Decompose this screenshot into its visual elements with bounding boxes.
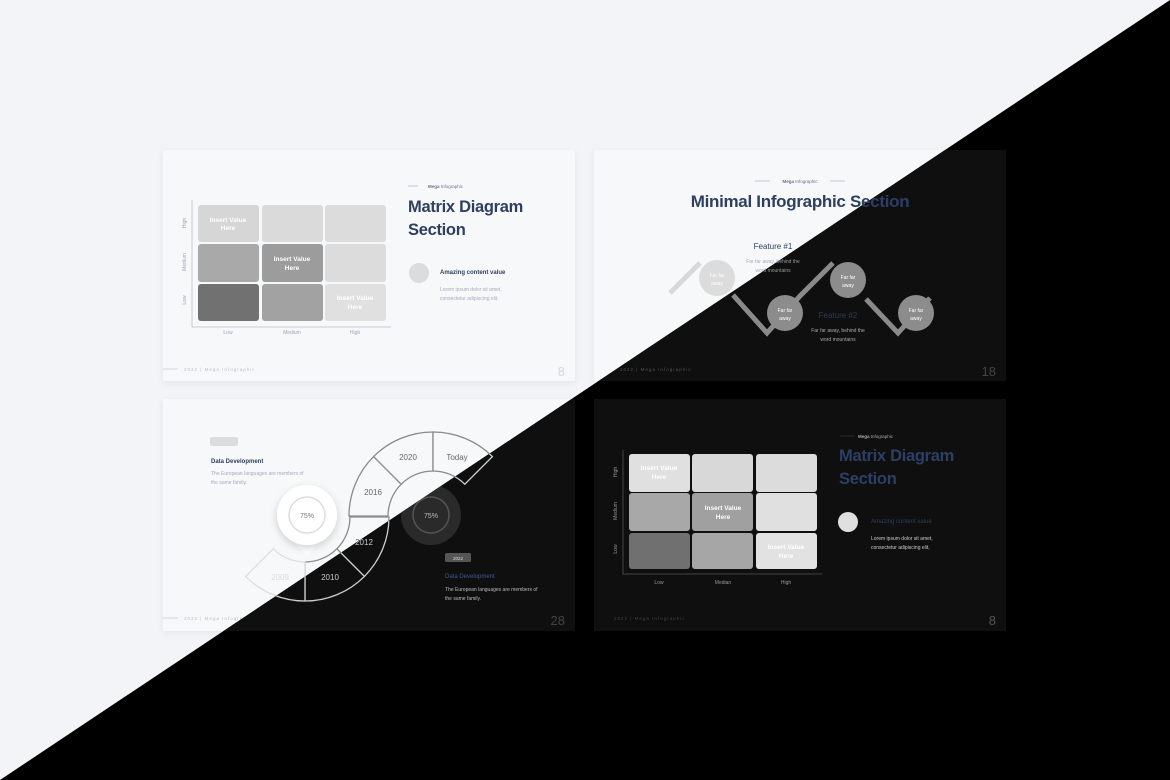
text block: data development: the same family.: [211, 480, 247, 486]
text block: amazing content dark: [871, 519, 933, 551]
zigzag dark: away: [910, 316, 922, 322]
zigzag light: Far far: [710, 273, 725, 279]
feature 2: [811, 311, 865, 343]
panel: timeline light: 2009: [271, 573, 289, 582]
footer: 2022 | Mega Infographic: [184, 367, 255, 372]
panel: timeline light: 2016: [364, 488, 382, 497]
footer: 8: [558, 364, 565, 379]
matrix grid dark: Here: [716, 514, 731, 521]
light layer: [163, 150, 1006, 631]
panel: timeline light: 2022 | Mega Infographic: [184, 616, 255, 621]
panel: matrix diagram dark: 8: [989, 613, 996, 628]
text block: amazing content: Amazing content value: [440, 270, 506, 276]
panel: timeline light: Today: [446, 453, 468, 462]
footer: [163, 364, 565, 379]
text block: data development: Data Development: [211, 459, 263, 465]
text block: amazing content: [440, 270, 506, 302]
icon: pin dark: [838, 512, 858, 532]
zigzag dark: away: [842, 283, 854, 289]
panel: timeline dark: 28: [551, 613, 565, 628]
matrix grid: Medium: [182, 253, 188, 271]
icon: pin: [409, 263, 429, 283]
feature 1: word mountains: [755, 268, 791, 274]
heading: matrix diagram section dark: Mega Infographic: [858, 434, 894, 439]
matrix grid: Insert Value: [337, 295, 374, 302]
donut 75% dark: 75%: [424, 513, 438, 520]
matrix grid dark: Insert Value: [641, 465, 678, 472]
panel: timeline light: 2012: [355, 538, 373, 547]
panel: matrix diagram light: [163, 150, 575, 381]
feature 1: Feature #1: [754, 242, 793, 251]
panel: timeline light: 2010: [321, 573, 339, 582]
matrix grid: Medium: [283, 330, 301, 336]
panel: timeline light: [163, 399, 575, 631]
text block: data development dark: the same family.: [445, 596, 481, 602]
text block: data development dark: 2022: [453, 556, 464, 561]
matrix grid: Here: [285, 265, 300, 272]
matrix grid dark: High: [781, 580, 791, 586]
panel: timeline dark: [224, 399, 575, 631]
matrix grid dark: High: [613, 467, 619, 477]
ring segments light: [246, 432, 492, 601]
panel: minimal infographic dark: 2022 | Mega Infographic: [620, 367, 691, 372]
matrix grid dark: Medium: [613, 502, 619, 520]
matrix grid: High: [182, 218, 188, 228]
panel: timeline dark: 2012: [355, 538, 373, 547]
text block: data development: [211, 459, 304, 486]
text block: amazing content dark: Lorem ipsum dolor sit amet,: [871, 536, 933, 542]
feature 2: Far far away, behind the: [811, 328, 865, 334]
panel: minimal infographic dark: Far far away, behind the: [746, 259, 800, 265]
matrix grid dark: Here: [652, 474, 667, 481]
heading: matrix diagram section dark: Section: [839, 470, 897, 488]
matrix grid: Low: [182, 295, 188, 305]
matrix grid: [182, 200, 391, 336]
feature 1: [746, 242, 800, 274]
matrix grid dark: Median: [715, 580, 731, 586]
heading: matrix diagram section dark: [839, 434, 954, 488]
text block: amazing content: Lorem ipsum dolor sit amet,: [440, 287, 502, 293]
zigzag dark: Far far: [909, 308, 924, 314]
panel: minimal infographic dark: 18: [982, 364, 996, 379]
matrix grid: High: [350, 330, 360, 336]
heading: matrix diagram section: [408, 184, 523, 239]
heading: matrix diagram section: Matrix Diagram: [408, 198, 523, 216]
matrix grid: Here: [221, 225, 236, 232]
feature 2: Feature #2: [819, 311, 858, 320]
panel: matrix diagram dark: 2022 | Mega Infographic: [614, 616, 685, 621]
donut 75% light: [277, 485, 337, 556]
matrix grid dark: Here: [779, 553, 794, 560]
zigzag dark: [731, 261, 934, 337]
feature 1: Far far away, behind the: [746, 259, 800, 265]
matrix grid dark: Insert Value: [768, 544, 805, 551]
panel: minimal infographic dark: Minimal Infographic Section: [691, 192, 909, 211]
zigzag light: away: [711, 281, 723, 287]
text block: data development dark: The European languages are members of: [445, 587, 538, 593]
heading: matrix diagram section dark: Matrix Diagram: [839, 447, 954, 465]
panel: minimal infographic light: Mega Infographic: [782, 179, 818, 184]
title: Minimal Infographic Section: [691, 192, 909, 211]
text block: data development: The European languages are members of: [211, 471, 304, 477]
zigzag light: [670, 260, 930, 333]
panel: timeline light: 2020: [399, 453, 417, 462]
text block: data development dark: Data Development: [445, 574, 495, 580]
text block: amazing content dark: Amazing content value: [871, 519, 932, 525]
text block: data development dark: [445, 553, 538, 602]
matrix grid dark: Low: [654, 580, 664, 586]
text block: amazing content: consectetur adipiscing elit.: [440, 296, 499, 302]
panel: minimal infographic dark: word mountains: [755, 268, 791, 274]
matrix grid: Here: [348, 304, 363, 311]
panel: timeline dark: 2010: [321, 573, 339, 582]
panel: minimal infographic light: [594, 150, 1006, 381]
matrix grid: Low: [223, 330, 233, 336]
heading: matrix diagram section: Section: [408, 221, 466, 239]
matrix grid: Insert Value: [210, 217, 247, 224]
feature 2: word mountains: [820, 337, 856, 343]
text block: amazing content dark: consectetur adipiscing elit,: [871, 545, 930, 551]
heading: matrix diagram section: Mega Infographic: [428, 184, 464, 189]
donut 75% dark: [401, 486, 461, 545]
panel: minimal infographic dark: [594, 150, 1006, 381]
matrix grid dark: Low: [613, 544, 619, 554]
panel: matrix diagram dark: [594, 399, 1006, 631]
zigzag dark: Far far: [778, 308, 793, 314]
zigzag dark: away: [779, 316, 791, 322]
matrix grid dark: Insert Value: [705, 505, 742, 512]
donut 75% light: 75%: [300, 513, 314, 520]
matrix grid dark: [613, 450, 822, 586]
zigzag dark: Far far: [841, 275, 856, 281]
matrix grid: Insert Value: [274, 256, 311, 263]
